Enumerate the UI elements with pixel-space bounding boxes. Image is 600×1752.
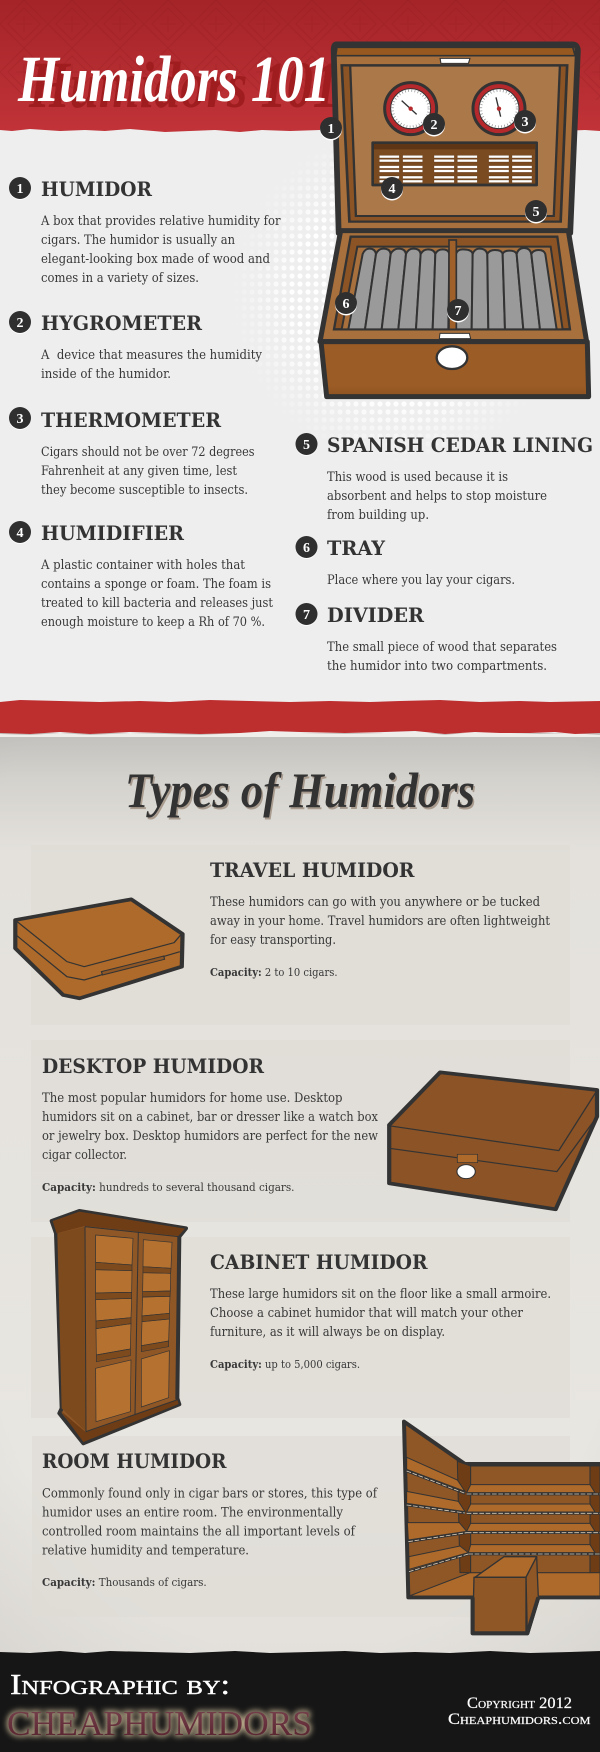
heading: DESKTOP HUMIDOR — [42, 1054, 265, 1078]
description: comes in a variety of sizes. — [41, 271, 199, 286]
description: the humidor into two compartments. — [327, 659, 547, 674]
description: from building up. — [327, 508, 429, 523]
description: Fahrenheit at any given time, lest — [41, 464, 237, 479]
humidor lid — [334, 44, 578, 233]
badge 7 — [296, 603, 318, 626]
description: The most popular humidors for home use. Desktop — [42, 1091, 342, 1106]
heading: HUMIDIFIER — [41, 521, 185, 545]
badge 3: 3 — [16, 412, 24, 427]
front oval lock — [437, 346, 467, 369]
description: controlled room maintains the all important levels of — [42, 1524, 357, 1540]
heading: THERMOMETER — [41, 408, 222, 432]
badge 4: 4 — [16, 526, 24, 541]
heading: Types of Humidors: Types of Humidors — [126, 764, 476, 820]
description: away in your home. Travel humidors are often lightweight — [210, 914, 550, 929]
humidor callout numbers: 7 — [454, 304, 462, 319]
badge 5 — [296, 433, 318, 456]
lower paper background — [0, 733, 600, 1658]
description: furniture, as it will always be on display. — [210, 1325, 445, 1340]
copyright: Copyright 2012 — [467, 1695, 572, 1712]
humidor base and tray — [320, 231, 589, 397]
badge 1 — [9, 177, 31, 200]
badge 2 — [9, 311, 31, 334]
humidor callout numbers — [320, 110, 547, 322]
front clasp — [439, 333, 471, 339]
description — [210, 1287, 551, 1340]
description — [41, 445, 254, 498]
humidifier box — [373, 143, 537, 185]
description: or jewelry box. Desktop humidors are perfect for the new — [42, 1129, 378, 1144]
section: spanish cedar lining — [296, 433, 593, 523]
badge 3 — [9, 407, 31, 430]
description: enough moisture to keep a Rh of 70 %. — [41, 615, 265, 630]
halftone dots behind humidor — [266, 178, 484, 430]
description: cigar collector. — [42, 1148, 127, 1163]
badge 5: 5 — [303, 438, 310, 453]
description: elegant-looking box made of wood and — [41, 252, 271, 267]
back wall — [471, 1466, 590, 1573]
centre display block — [473, 1557, 538, 1633]
description: cigars. The humidor is usually an — [41, 233, 235, 248]
copyright: Cheaphumidors.com — [448, 1711, 591, 1728]
humidor dials and humidifier — [373, 83, 537, 185]
description — [327, 640, 557, 674]
shelf edges — [407, 1471, 600, 1572]
icon: walk-in room — [404, 1422, 600, 1633]
humidor callout numbers: 3 — [522, 115, 528, 130]
badge 4 — [9, 521, 31, 544]
description — [42, 1486, 379, 1558]
description: The small piece of wood that separates — [327, 640, 557, 655]
description: A plastic container with holes that — [40, 558, 245, 573]
description: Choose a cabinet humidor that will match your other — [210, 1306, 523, 1321]
description: These humidors can go with you anywhere or be tucked — [210, 895, 540, 910]
badge 6: 6 — [303, 541, 310, 556]
heading: SPANISH CEDAR LINING — [327, 433, 593, 457]
title: Humidors 101: Humidors 101 — [17, 43, 330, 116]
description: treated to kill bacteria and releases just — [41, 596, 273, 611]
description: humidors sit on a cabinet, bar or dresser like a watch box — [42, 1110, 378, 1125]
credit: Infographic by: Infographic by: — [10, 1670, 230, 1701]
humidor callout numbers: 2 — [430, 118, 438, 133]
description: contains a sponge or foam. The foam is — [41, 577, 271, 592]
corner posts — [457, 1461, 471, 1573]
illustration: open humidor — [320, 44, 589, 397]
front panel — [321, 342, 589, 397]
description: These large humidors sit on the floor like a small armoire. — [210, 1287, 551, 1302]
description: A device that measures the humidity — [40, 348, 262, 363]
description: relative humidity and temperature. — [42, 1544, 249, 1558]
heading: HYGROMETER — [41, 311, 203, 335]
hygrometer dial — [385, 83, 437, 135]
capacity: Capacity: 2 to 10 cigars. — [210, 965, 338, 979]
humidor callout numbers: 4 — [388, 182, 396, 197]
footer — [0, 1651, 600, 1752]
panel: room humidor — [32, 1436, 570, 1617]
heading: CABINET HUMIDOR — [210, 1250, 429, 1274]
humidor callout numbers: 1 — [328, 122, 334, 137]
heading: TRAVEL HUMIDOR — [210, 858, 416, 882]
heading: ROOM HUMIDOR — [42, 1449, 228, 1473]
description: A box that provides relative humidity for — [40, 214, 281, 229]
badge 6 — [296, 536, 318, 559]
description: for easy transporting. — [210, 933, 336, 948]
description: Place where you lay your cigars. — [327, 573, 515, 588]
divider — [449, 240, 456, 329]
logo: Cheaphumidors: CHEAPHUMIDORS — [7, 1704, 312, 1743]
floor — [409, 1573, 600, 1596]
cigars — [348, 248, 557, 329]
description: Cigars should not be over 72 degrees — [41, 445, 254, 460]
red header band with torn edge — [0, 0, 600, 132]
humidor callout numbers: 6 — [342, 297, 350, 312]
description: Commonly found only in cigar bars or stores, this type of — [42, 1486, 379, 1502]
logo: Cheaphumidors: CHEAPHUMIDORS — [7, 1704, 312, 1743]
icon: travel case — [15, 899, 183, 998]
capacity: Capacity: hundreds to several thousand cigars. — [42, 1180, 294, 1194]
panel: travel humidor — [15, 845, 570, 1025]
capacity: Capacity: Thousands of cigars. — [42, 1575, 207, 1589]
description: absorbent and helps to stop moisture — [327, 489, 547, 504]
heading: Types of Humidors: Types of Humidors — [125, 762, 475, 818]
description — [40, 214, 281, 286]
heading: HUMIDOR — [41, 177, 153, 201]
section: thermometer — [9, 407, 254, 498]
description — [40, 558, 273, 630]
description: inside of the humidor. — [41, 367, 171, 382]
description: This wood is used because it is — [327, 470, 508, 485]
description — [40, 348, 262, 382]
section: humidifier — [9, 521, 273, 630]
capacity: Capacity: up to 5,000 cigars. — [210, 1357, 360, 1371]
section: divider — [296, 603, 557, 674]
section: hygrometer — [9, 311, 262, 382]
description: humidor uses an entire room. The environmentally — [42, 1506, 343, 1520]
icon: cabinet armoire — [52, 1211, 186, 1443]
panel: desktop humidor — [31, 1040, 597, 1222]
badge 1: 1 — [16, 182, 24, 197]
title: Humidors 101: Humidors 101 — [28, 49, 339, 122]
copyright — [448, 1695, 591, 1728]
humidor callout numbers: 5 — [532, 205, 540, 220]
red torn divider stripe — [0, 700, 600, 737]
description — [327, 470, 547, 523]
panel: cabinet humidor — [31, 1237, 570, 1418]
shelves — [407, 1457, 595, 1569]
description — [210, 895, 550, 948]
section: tray — [296, 536, 515, 588]
badge 7: 7 — [303, 608, 310, 623]
thermometer dial — [473, 83, 525, 135]
description: they become susceptible to insects. — [41, 483, 248, 498]
badge 2: 2 — [16, 316, 24, 331]
description — [42, 1091, 378, 1163]
heading: TRAY — [327, 536, 386, 560]
section: humidor — [9, 177, 281, 286]
heading: DIVIDER — [327, 603, 425, 627]
icon: desktop box — [389, 1072, 597, 1209]
